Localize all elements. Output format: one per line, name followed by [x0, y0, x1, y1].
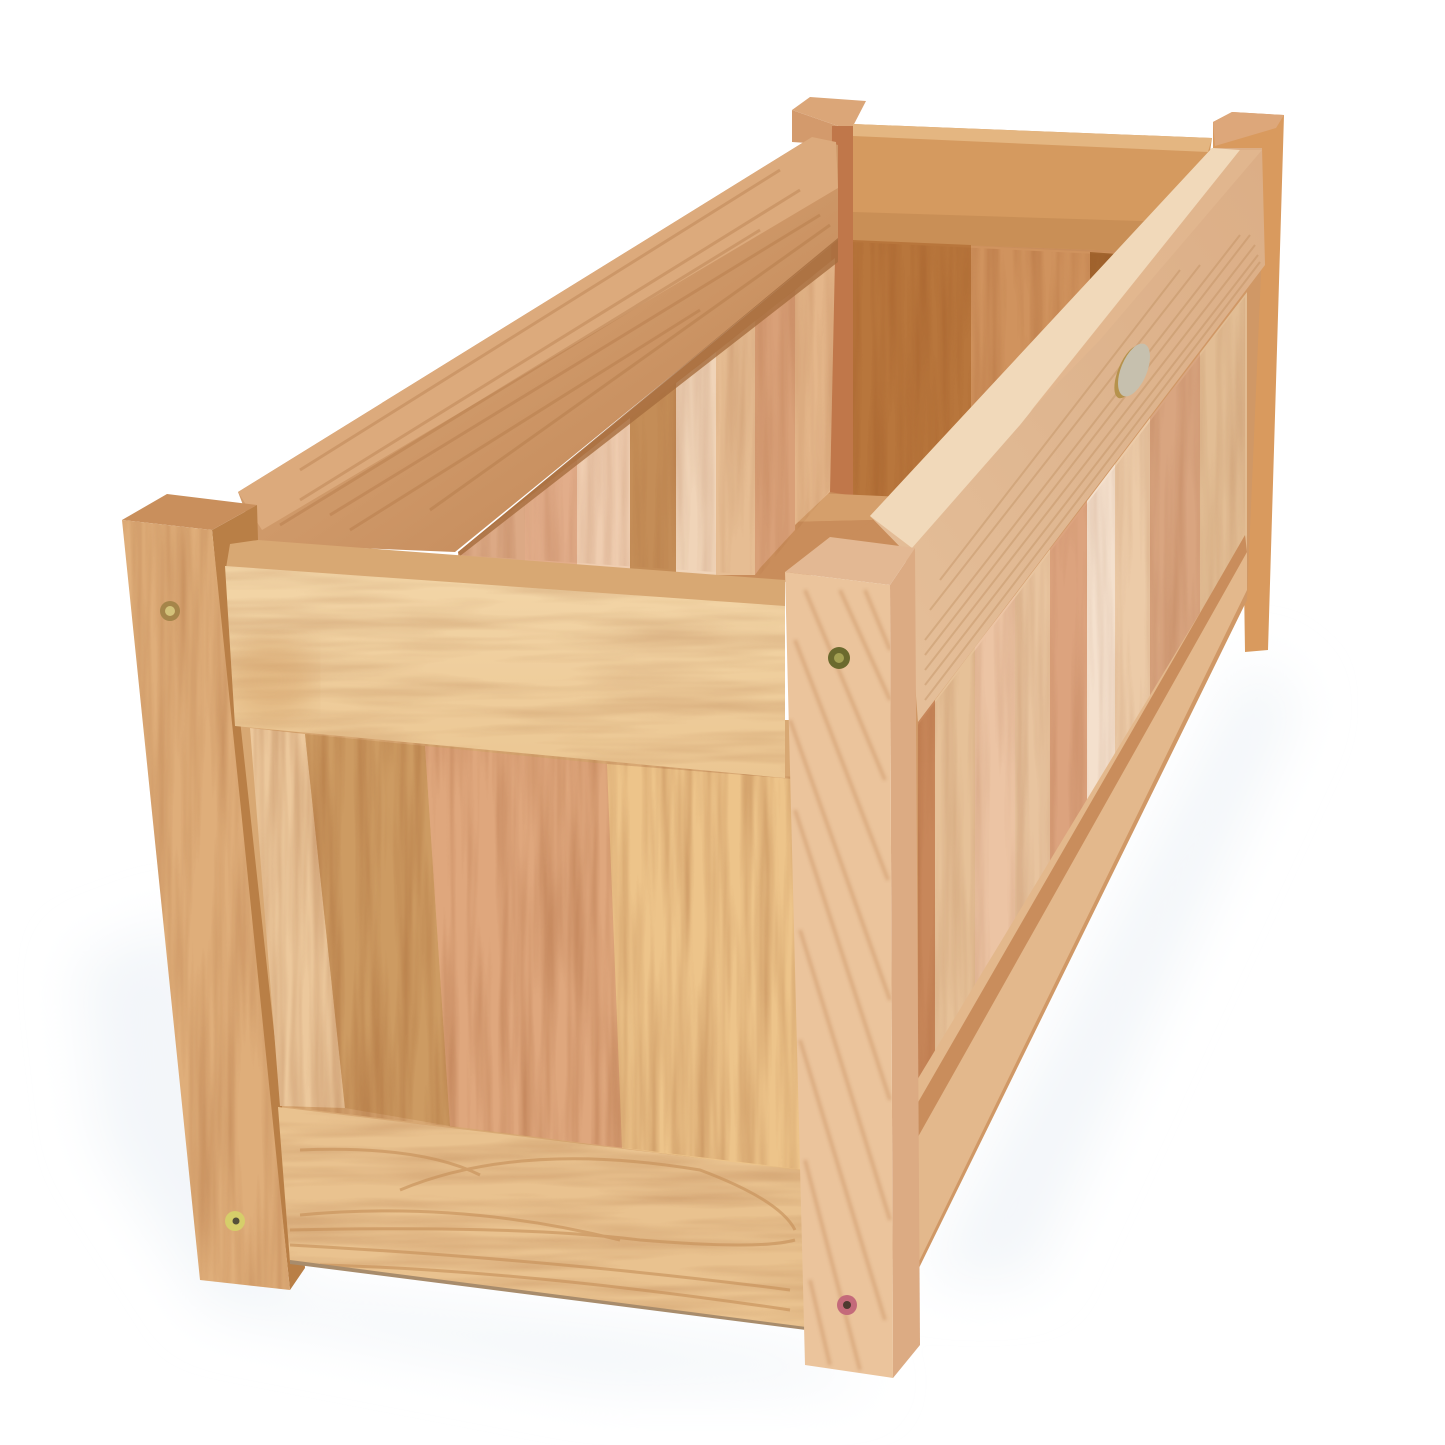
metal drain plate: [1108, 339, 1157, 402]
interior underlay: [458, 240, 1118, 582]
right long side bottom rail: [905, 535, 1247, 1290]
floor shadow: [80, 660, 1300, 1385]
left post side face: [212, 505, 305, 1290]
inner top rail of left long side: [238, 137, 838, 556]
back rail: [853, 124, 1212, 252]
side underlay: [905, 250, 1262, 1270]
right front corner post: [785, 537, 920, 1378]
right long side panel boards: [918, 292, 1247, 1105]
inner floor cleats: [760, 493, 905, 575]
planter box: [120, 97, 1284, 1378]
left front corner post: [120, 494, 292, 1292]
back wall boards: [853, 240, 1114, 496]
right long side top rail: [870, 148, 1265, 722]
front bottom rail: [278, 1107, 808, 1330]
screw: [160, 601, 180, 621]
screw: [225, 1211, 245, 1231]
back right corner post: [1213, 112, 1284, 652]
screw: [837, 1295, 857, 1315]
illustration: wooden planter box: [98, 97, 1284, 1378]
screw: [828, 647, 850, 669]
back left corner post: [792, 97, 866, 496]
front panel boards: [250, 728, 806, 1173]
front underlay: [240, 720, 806, 1328]
inner wall boards: [458, 258, 836, 578]
front top rail: [225, 540, 787, 780]
